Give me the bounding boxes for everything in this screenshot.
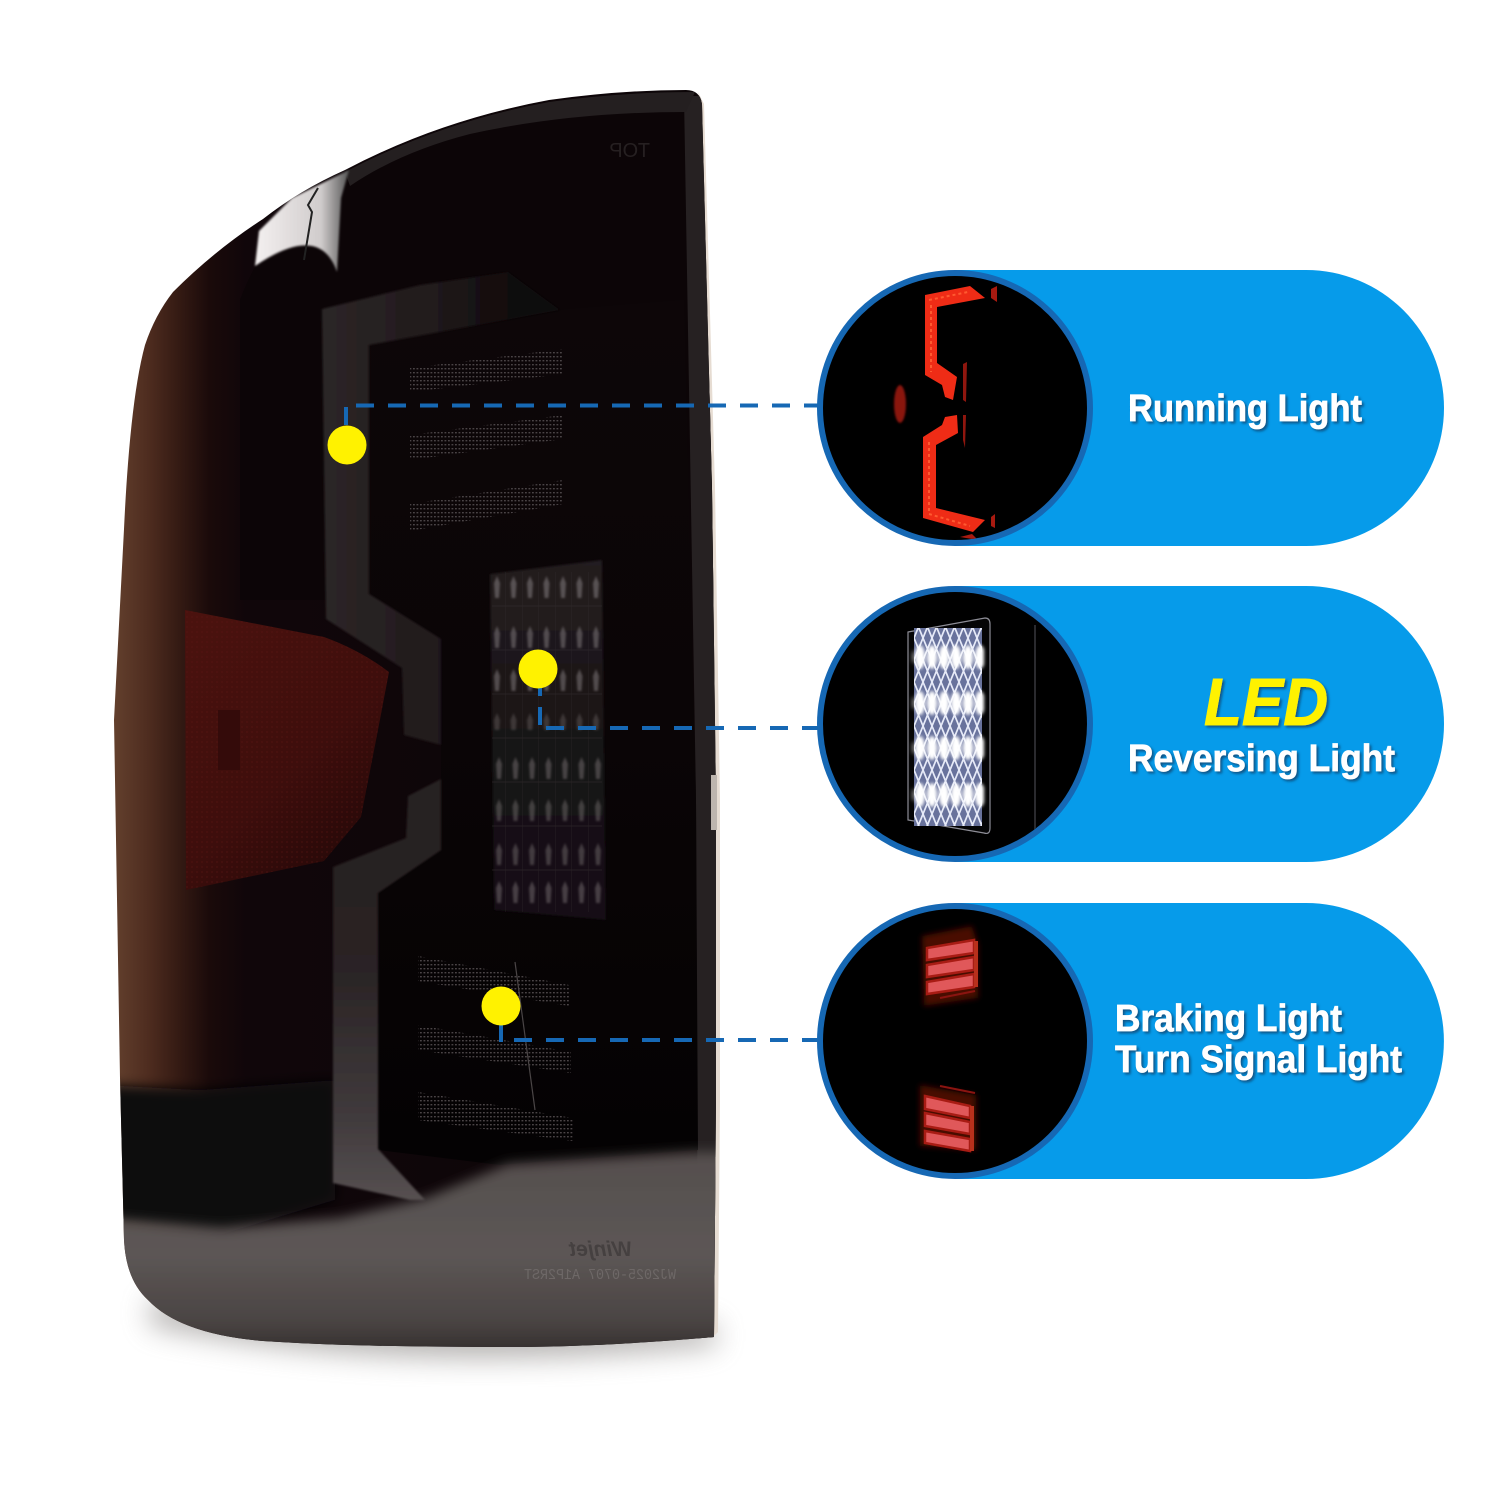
label: braking light: Braking Light bbox=[1115, 998, 1342, 1040]
top bezel bbox=[345, 92, 695, 186]
pill background bbox=[955, 586, 1444, 862]
panel: reversing light bbox=[820, 586, 1444, 862]
inset photo: reversing light bbox=[820, 589, 1090, 859]
label: reversing light: Reversing Light bbox=[1128, 738, 1395, 780]
moulded part number: WJ2025-0707 A1P2RST bbox=[524, 1267, 676, 1284]
marker bbox=[482, 986, 520, 1026]
moulded TOP mark: TOP bbox=[609, 140, 650, 162]
upper LED strips bbox=[410, 349, 563, 531]
callout: braking light bbox=[482, 986, 818, 1042]
reversing lens bbox=[490, 560, 606, 920]
inset photo: running light bbox=[820, 273, 1090, 543]
leader line bbox=[346, 406, 818, 425]
red reflector bbox=[185, 610, 389, 890]
inner frame lower bbox=[333, 779, 441, 1200]
lamp shadow bbox=[150, 1300, 716, 1358]
lamp outer edge highlight bbox=[698, 92, 720, 1338]
leader line bbox=[501, 1024, 818, 1042]
panel: braking and turn signal light bbox=[820, 903, 1444, 1179]
panel: running light bbox=[820, 270, 1444, 546]
upper dark hood bbox=[709, 379, 714, 596]
moulded brand mark: Winjet bbox=[568, 1238, 632, 1261]
grey bottom of lens bbox=[100, 1152, 730, 1360]
marker bbox=[518, 650, 558, 688]
label: running light: Running Light bbox=[1128, 388, 1362, 430]
tail light product photo bbox=[100, 85, 730, 1360]
lower LED strips bbox=[418, 956, 573, 1141]
side clip bbox=[711, 775, 717, 830]
right bezel bbox=[684, 96, 718, 1340]
callout: running light bbox=[328, 406, 818, 464]
inner dark panel bbox=[378, 834, 698, 1164]
callout: reversing light bbox=[518, 650, 818, 728]
leader line bbox=[540, 688, 818, 728]
pill background bbox=[955, 903, 1444, 1179]
inset photo: braking light bbox=[820, 906, 1090, 1176]
lower navy shadow bbox=[120, 1078, 244, 1232]
inner frame upper bbox=[322, 273, 508, 744]
marker bbox=[328, 426, 366, 464]
label: turn signal light: Turn Signal Light bbox=[1115, 1039, 1402, 1081]
pill background bbox=[955, 270, 1444, 546]
lamp body bbox=[100, 85, 730, 1360]
label: LED: LED bbox=[1204, 665, 1328, 740]
chrome reflection bbox=[255, 170, 349, 272]
